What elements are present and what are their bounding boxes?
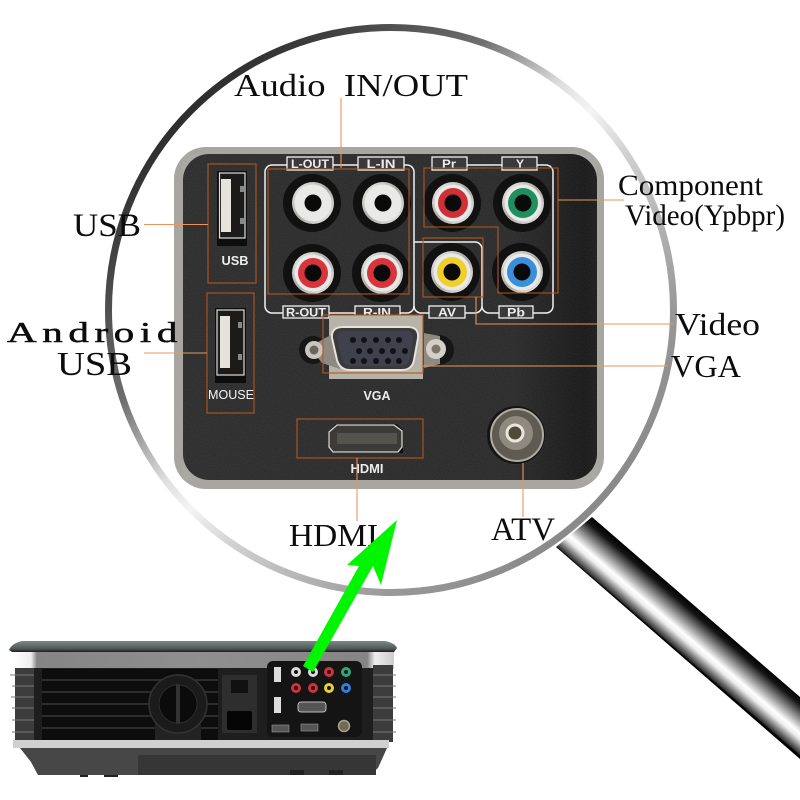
label: ATV: ATV [491, 512, 555, 548]
icon: mouse USB port [215, 308, 246, 383]
projector port panel [267, 661, 362, 737]
tag: Y: Y [516, 157, 524, 171]
tag: R-OUT: R-OUT [286, 306, 327, 320]
tag: L-IN: L-IN [366, 157, 396, 171]
audio jack: L-OUT [283, 174, 341, 232]
callout lines [144, 98, 673, 521]
magnifier lens [108, 28, 674, 592]
icon: HDMI port [328, 424, 403, 453]
tag: Pr: Pr [442, 157, 456, 171]
port tags [283, 157, 537, 320]
icon: USB port [217, 171, 247, 246]
tag: Pb: Pb [507, 306, 525, 320]
icon: VGA connector [299, 315, 454, 379]
projector side vents [10, 665, 396, 742]
tag: Y [502, 157, 537, 171]
tag: R-IN: R-IN [363, 306, 391, 320]
label: Android USB: Android [7, 317, 183, 349]
label: Android USB [7, 317, 183, 383]
projector lens knob [149, 675, 207, 742]
projector top [9, 641, 397, 652]
projector silver band [12, 652, 394, 669]
label: Component Video(Ypbpr): Video(Ypbpr) [625, 199, 785, 232]
tag: R-IN [355, 306, 400, 320]
audio jack: L-IN [353, 174, 411, 232]
label: HDMI: HDMI [289, 517, 378, 553]
magnifier handle [556, 517, 800, 759]
label: USB: USB [73, 208, 141, 244]
component jack: Y [493, 174, 551, 232]
arrow: green pointer from projector to magnified panel [303, 520, 397, 672]
projector vent grille [42, 669, 218, 740]
audio jack: R-IN [352, 244, 410, 302]
orange callout boxes [207, 164, 558, 458]
projector power socket [222, 675, 257, 733]
text: VGA port label: VGA [364, 388, 391, 403]
text: USB port label: USB [222, 253, 248, 268]
label: VGA: VGA [671, 348, 741, 384]
label: Audio IN/OUT: Audio IN/OUT [234, 67, 469, 103]
text: HDMI port label: HDMI [350, 461, 384, 476]
tag: AV: AV [438, 306, 456, 320]
white frames around jack groups [265, 165, 553, 313]
tag: Pr [432, 157, 467, 171]
label: Component Video(Ypbpr): Component [618, 169, 764, 202]
projector front face [34, 668, 373, 741]
tag: AV [429, 306, 465, 320]
icon: ATV coaxial connector [487, 406, 545, 464]
tag: Pb [499, 306, 533, 320]
projector lower silver band [13, 740, 389, 748]
video jack: AV [422, 243, 480, 301]
component jack: Pb [492, 243, 550, 301]
connector panel [174, 147, 604, 489]
component jack: Pr [423, 174, 481, 232]
projector [9, 641, 397, 777]
label: Component Video(Ypbpr) [618, 169, 785, 232]
tag: L-IN [358, 157, 404, 171]
label: Android USB: USB [57, 346, 132, 383]
audio jack: R-OUT [283, 244, 341, 302]
text: MOUSE label: MOUSE [208, 387, 254, 402]
tag: L-OUT: L-OUT [291, 157, 330, 171]
projector base [20, 748, 387, 777]
label: Video: Video [675, 306, 760, 342]
